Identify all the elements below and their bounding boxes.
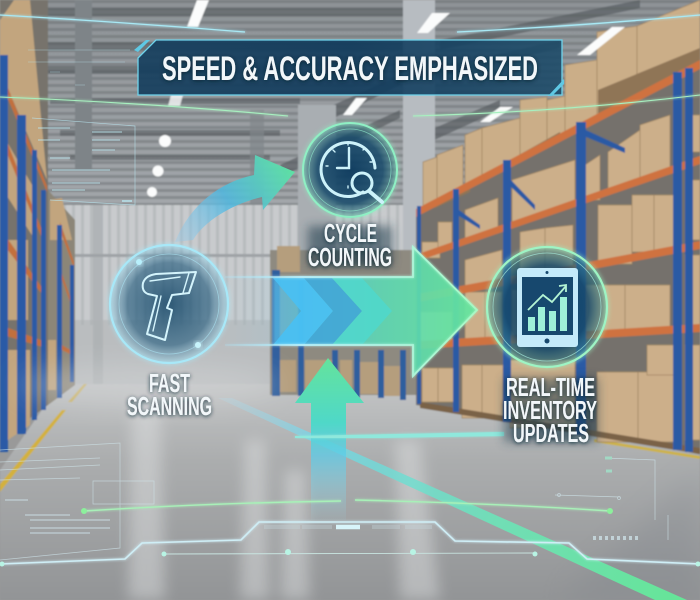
HUD data panel: lower left [0,443,154,560]
label backing [308,226,392,266]
label: real-time inventory updates: INVENTORY [503,395,597,425]
label: cycle counting [308,218,392,272]
icon: tablet with chart [517,268,578,347]
horizontal feed line to updates [295,432,504,438]
circuit nodes [0,508,700,566]
label: real-time inventory updates: REAL-TIME [506,372,595,402]
pillar [403,0,435,250]
node: cycle counting [303,123,397,272]
pallets [420,402,700,454]
chevrons [273,278,392,345]
arrow: large horizontal to real-time updates [225,247,477,376]
orange shelf beams [416,60,700,349]
boxes on shelves [420,115,700,442]
boxes on top of rack [423,0,700,211]
back wall [55,105,415,390]
label: fast scanning: FAST [149,368,190,398]
node: real-time inventory updates [487,247,607,448]
floor HUD circuit [0,500,700,566]
banner corner accents [134,40,564,96]
icon disc [110,245,228,363]
node: fast scanning [110,245,228,421]
label: fast scanning: SCANNING [127,391,212,421]
arrow: curved, scanning to cycle counting [175,155,295,242]
far rack [270,246,420,400]
label backing [504,378,598,442]
top holographic lines [0,15,700,116]
HUD data panel: upper left [28,50,135,205]
icon: clock with magnifier [321,143,382,202]
yellow floor lines [0,384,700,492]
title banner [134,40,564,96]
label: cycle counting: COUNTING [308,242,392,272]
right racks [416,0,700,454]
floor [0,384,700,600]
label: real-time inventory updates [503,372,597,448]
icon disc [487,247,607,367]
ceiling [0,0,700,220]
label: real-time inventory updates: UPDATES [513,418,589,448]
icon disc [303,123,397,217]
arrow: diagonal floor beam [218,398,687,600]
ceiling lights [147,0,625,197]
label: cycle counting: CYCLE [324,218,377,248]
blue uprights [417,68,693,452]
haze [20,365,280,405]
left racks [0,0,75,452]
icon: barcode scanner [143,272,196,340]
HUD data panel: lower right [555,458,668,540]
arrow: vertical upward [295,358,364,520]
label: fast scanning [127,368,212,421]
